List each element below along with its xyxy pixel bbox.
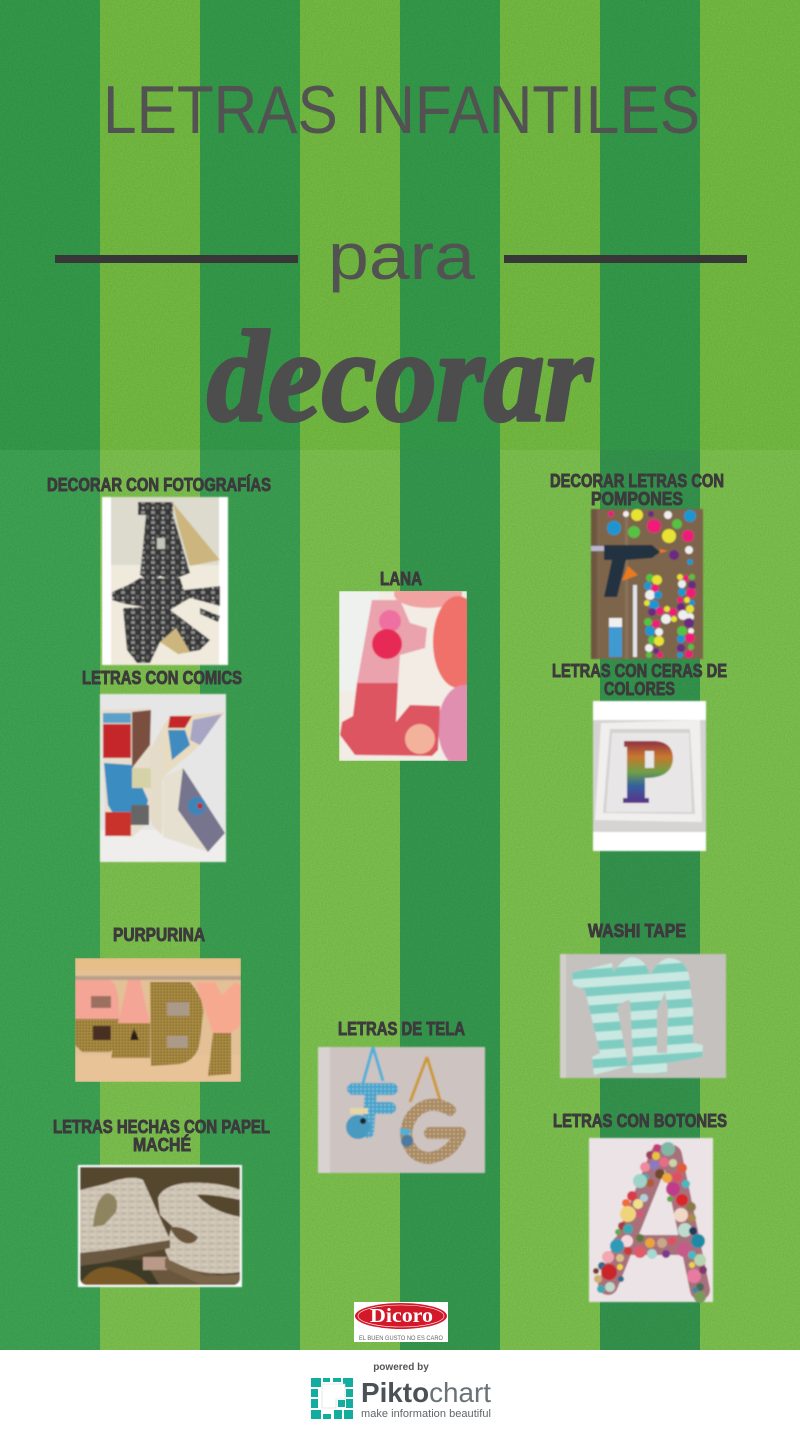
photo: glitter BABY letters [75,958,241,1082]
heading: pompones [550,471,724,509]
heading: ceras de colores: COLORES [604,679,675,699]
heading: washi tape: WASHI TAPE [588,921,686,941]
photo: washi tape letter M [560,954,726,1078]
heading: pompones: DECORAR LETRAS CON [550,471,724,491]
heading: lana: LANA [380,569,422,589]
footer: white band [0,1350,800,1430]
heading: ceras de colores: LETRAS CON CERAS DE [552,661,727,681]
photo: letters with photographs [102,497,228,665]
logo: Dicoro: Dicoro [370,1305,433,1327]
divider line right [504,255,747,263]
heading: fotografias: DECORAR CON FOTOGRAFÍAS [47,474,271,495]
heading: tela: LETRAS DE TELA [338,1019,465,1039]
photo: papier-mache letters [78,1165,242,1287]
photo: button letter A [589,1138,713,1303]
divider line left [55,255,298,263]
heading: pompones: POMPONES [591,489,683,509]
photo: framed crayon letter P [593,701,706,851]
logo: Piktochart wordmark: Piktochart [361,1377,491,1408]
heading: ceras de colores [552,661,727,699]
title: letras infantiles: LETRAS INFANTILES [103,72,700,148]
footer text: tagline: make information beautiful [361,1408,491,1420]
photo: wool-wrapped letter L [339,591,467,761]
photo: fabric letters F and G [318,1047,485,1173]
footer text: powered by: powered by [373,1362,429,1373]
heading: purpurina: PURPURINA [113,925,205,945]
photo: comic letter K [100,694,226,862]
logo: Dicoro: EL BUEN GUSTO NO ES CARO [359,1335,443,1342]
title: decorar: decorar [207,305,593,449]
heading: botones: LETRAS CON BOTONES [553,1111,727,1131]
heading: comics: LETRAS CON COMICS [82,668,242,688]
logo: Piktochart mark [311,1378,353,1419]
photo: glue gun and pompom letter H [591,509,703,659]
heading: papel mache [53,1117,270,1155]
heading: papel mache: MACHÉ [133,1134,191,1155]
heading: papel mache: LETRAS HECHAS CON PAPEL [53,1117,270,1137]
logo: Dicoro [354,1302,448,1342]
subtitle: para: para [328,219,475,293]
